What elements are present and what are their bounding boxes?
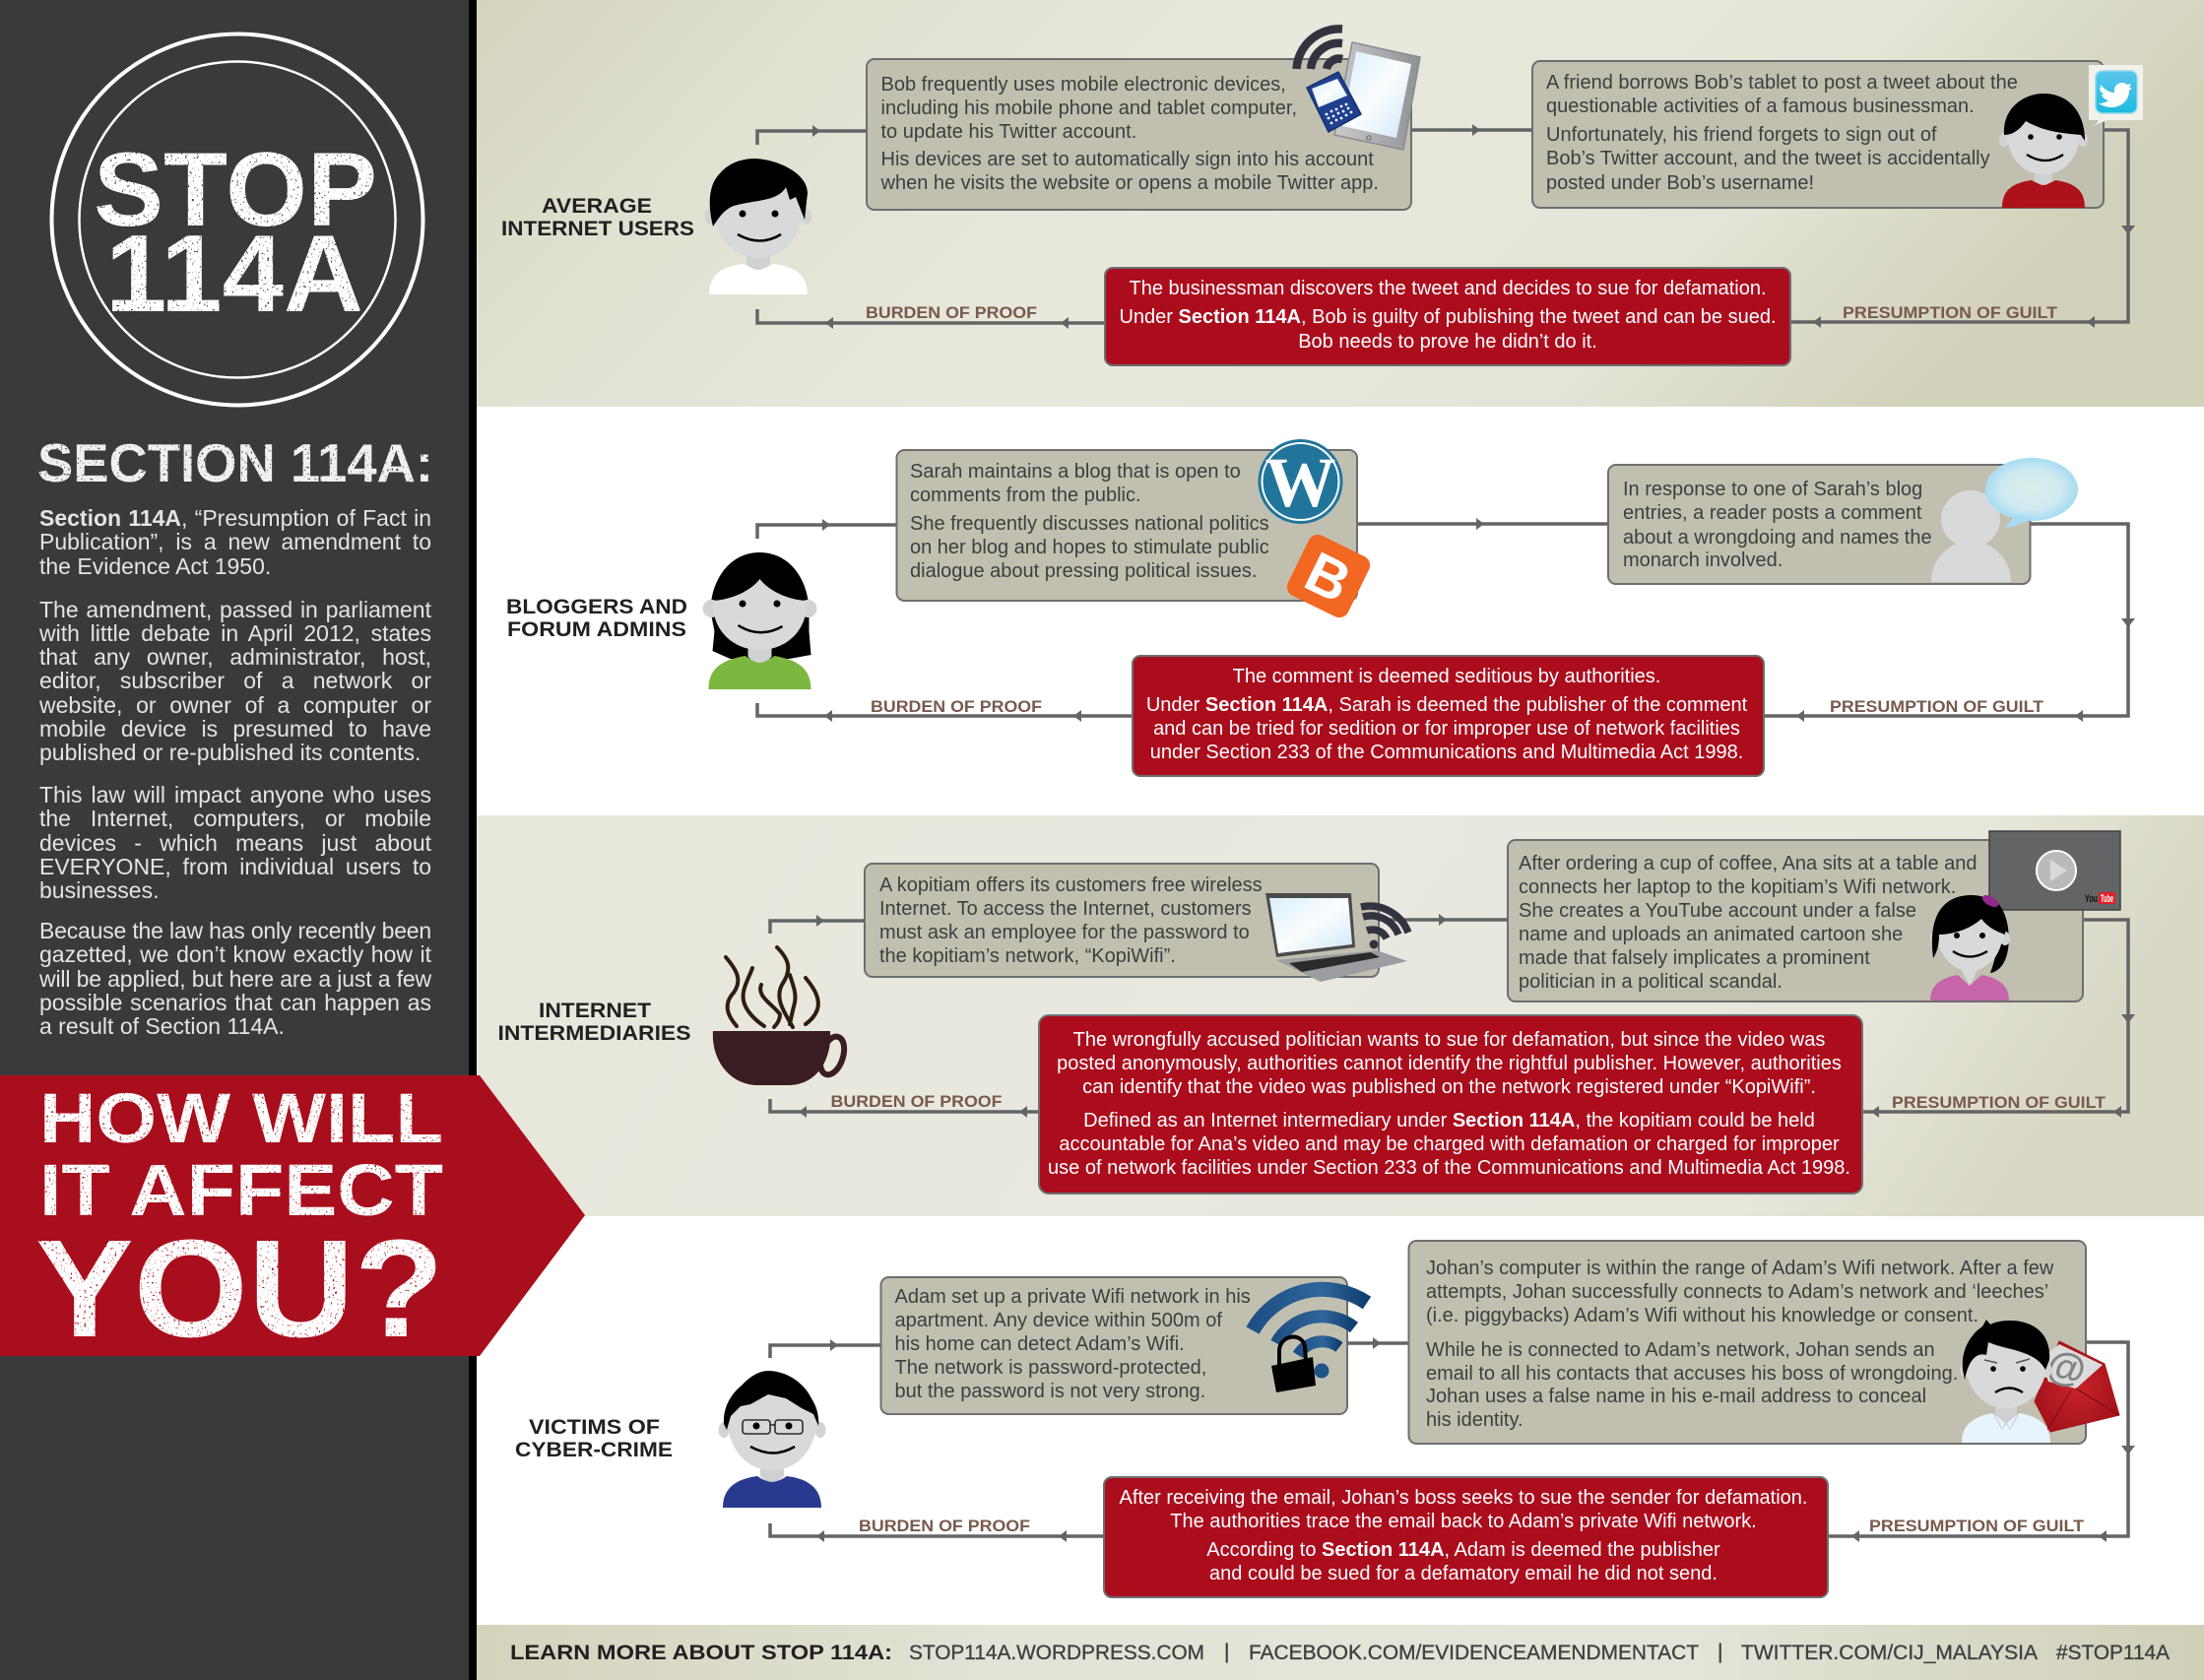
text box: friend's tweet: A friend borrows Bob’s tablet to post a tweet about the [1546,72,2018,94]
paragraph: who is affected [39,782,431,903]
icon: youtube video [1989,831,2120,910]
paragraph: what the amendment states [39,597,431,765]
category label: INTERMEDIARIES [498,1022,691,1045]
text box: Bob's devices: including his mobile phone and tablet computer, [880,97,1297,119]
text box: Bob's devices: Bob frequently uses mobile electronic devices, [880,74,1286,96]
paragraph: possible scenarios [39,918,431,1039]
text box: friend's tweet: posted under Bob’s username! [1546,172,1814,194]
paragraph: what section 114A is: the Evidence Act 1950. [39,553,271,579]
text box: Sarah's blog [896,450,1357,601]
text box: Ana's video: name and uploads an animated cartoon she [1519,924,1903,945]
character: anonymous reader [1931,490,2011,582]
paragraph: what the amendment states: that any owner, administrator, host, [39,644,431,670]
label: burden of proof: BURDEN OF PROOF [859,1518,1030,1535]
red box: consequence [1105,268,1790,365]
text box: Ana's video: After ordering a cup of coffee, Ana sits at a table and [1519,853,1977,874]
icon: wordpress: W [1264,443,1335,522]
text box: Adam's wifi: but the password is not very strong. [894,1381,1205,1402]
connector arrows [757,124,2135,329]
icon: steaming coffee cup [713,947,849,1085]
footer: links: TWITTER.COM/CIJ_MALAYSIA [1741,1642,2038,1664]
paragraph: what the amendment states: published or re-published its contents. [39,740,421,765]
paragraph: what section 114A is: Section 114A, “Presumption of Fact in [39,505,431,531]
red box: consequence: and can be tried for sedition or for improper use of network facilities [1153,718,1740,740]
logo: stop 114A stamp: STOP [94,130,377,248]
text box: Ana's video: connects her laptop to the kopitiam’s Wifi network. [1519,876,1956,898]
category label: VICTIMS OF [529,1416,660,1439]
character: Adam [719,1371,825,1508]
banner headline text [35,1080,444,1366]
paragraph: possible scenarios: will be applied, but here are a just a few [39,966,431,992]
text box: Bob's devices: when he visits the website or opens a mobile Twitter app. [880,172,1379,194]
paragraph: what the amendment states: The amendment, passed in parliament [39,597,431,622]
red box: consequence: The authorities trace the email back to Adam’s private Wifi network. [1170,1511,1757,1532]
label: presumption of guilt: PRESUMPTION OF GUILT [1830,698,2043,716]
connector arrows [770,1337,2135,1542]
icon: red envelope [2035,1341,2119,1432]
text box: Johan's email: his identity. [1426,1409,1523,1431]
red box: consequence: use of network facilities under Section 233 of the Communications and Multimedia Act 1998. [1048,1157,1850,1179]
text box: kopitiam wifi: A kopitiam offers its customers free wireless [879,874,1263,896]
text box: kopitiam wifi [865,864,1379,977]
red box: consequence: posted anonymously, authorities cannot identify the rightful publisher. However, authorities [1057,1053,1842,1074]
category label: BLOGGERS AND [506,596,687,618]
category label: FORUM ADMINS [507,618,686,641]
text box: Johan's email: (i.e. piggybacks) Adam’s Wifi without his knowledge or consent. [1426,1305,1978,1326]
icon: wifi, tablet and phone [1296,29,1420,150]
text box: Johan's email: While he is connected to Adam’s network, Johan sends an [1426,1339,1935,1361]
red box: consequence [1039,1015,1862,1194]
paragraph: who is affected: EVERYONE, from individual users to [39,854,431,879]
logo: stop 114A stamp [51,33,423,406]
paragraph: who is affected: the Internet, computers, or mobile [39,806,431,831]
character: Sarah [703,552,817,689]
paragraph: who is affected: businesses. [39,877,159,903]
text box: Bob's devices [867,59,1411,210]
red box: consequence: under Section 233 of the Communications and Multimedia Act 1998. [1150,742,1743,763]
red box: consequence [1104,1477,1828,1597]
panel: sidebar background [0,0,477,1680]
section 4: victims of cyber-crime [515,1241,2135,1597]
connector arrows [770,914,2135,1118]
red box: consequence: Defined as an Internet intermediary under Section 114A, the kopitiam could be held [1083,1110,1815,1131]
icon: youtube video: Tube [2101,893,2113,905]
red box: consequence: The comment is deemed seditious by authorities. [1233,666,1660,687]
icon: speech bubble [1985,458,2078,528]
banner headline text: YOU? [35,1210,444,1366]
text box: reader's comment: In response to one of Sarah’s blog [1623,479,1922,500]
text box: friend's tweet: Unfortunately, his friend forgets to sign out of [1546,124,1937,146]
paragraph: what the amendment states: mobile device is presumed to have [39,716,431,742]
banner: how will it affect you [0,1075,585,1366]
character: Bob [705,159,811,294]
section 1: average internet users [501,29,2143,365]
red box: consequence [1133,656,1764,776]
text box: friend's tweet: questionable activities of a famous businessman. [1546,96,1975,117]
banner headline text: IT AFFECT [39,1149,443,1231]
section 3: internet intermediaries [498,831,2135,1194]
paragraph: who is affected: devices - which means just about [39,830,431,856]
category label [501,195,694,240]
logo: stop 114A stamp: 114A [105,213,363,335]
category label: AVERAGE [542,195,652,218]
label: burden of proof: BURDEN OF PROOF [871,698,1042,716]
paragraph: possible scenarios: a result of Section 114A. [39,1013,285,1039]
footer: links [909,1641,2170,1664]
red box: consequence: Under Section 114A, Bob is guilty of publishing the tweet and can be sued. [1119,306,1777,328]
paragraph: what section 114A is [39,505,431,579]
paragraph: possible scenarios: possible scenarios that can happen as [39,990,431,1015]
sidebar body text [39,505,431,1039]
text box: Adam's wifi: his home can detect Adam’s Wifi. [894,1333,1185,1355]
red box: consequence: can identify that the video was published on the network registered under “KopiWifi”. [1082,1076,1816,1098]
paragraph: what section 114A is: Publication”, is a new amendment to [39,529,431,554]
footer: links: STOP114A.WORDPRESS.COM [909,1642,1204,1664]
text box: Sarah's blog: She frequently discusses national politics [910,513,1269,535]
red box: consequence: accountable for Ana’s video and may be charged with defamation or charged for improper [1059,1133,1840,1155]
footer: links: #STOP114A [2056,1642,2170,1664]
text box: Johan's email: email to all his contacts that accuses his boss of wrongdoing. [1426,1363,1958,1385]
icon: blogger: B [1295,540,1360,615]
footer: links: | [1718,1641,1722,1663]
text box: friend's tweet [1532,61,2104,208]
category label: CYBER-CRIME [515,1439,673,1461]
character: Ana [1930,893,2010,1001]
icon: laptop with wifi [1265,893,1408,982]
label: presumption of guilt: PRESUMPTION OF GUILT [1843,304,2057,322]
text box: reader's comment [1608,465,2031,584]
text box: Johan's email [1408,1241,2086,1444]
text box: Johan's email: Johan’s computer is within the range of Adam’s Wifi network. After a few [1426,1258,2054,1279]
footer: links: FACEBOOK.COM/EVIDENCEAMENDMENTACT [1249,1642,1699,1664]
red box: consequence: After receiving the email, Johan’s boss seeks to sue the sender for defamation. [1120,1487,1807,1509]
text box: friend's tweet: Bob’s Twitter account, and the tweet is accidentally [1546,148,1990,169]
footer: links: | [1224,1641,1229,1663]
text box: Sarah's blog: on her blog and hopes to stimulate public [910,537,1269,558]
category label [506,596,687,641]
heading: section 114A: SECTION 114A: [37,432,433,493]
paragraph: what the amendment states: with little debate in April 2012, states [39,620,431,646]
text box: Sarah's blog: Sarah maintains a blog that is open to [910,461,1241,483]
text box: Ana's video: politician in a political scandal. [1519,971,1783,993]
label: burden of proof: BURDEN OF PROOF [831,1093,1003,1111]
text box: reader's comment: monarch involved. [1623,549,1783,571]
text box: kopitiam wifi: the kopitiam’s network, “KopiWifi”. [879,945,1176,967]
label: presumption of guilt: PRESUMPTION OF GUILT [1869,1518,2084,1535]
footer: learn more heading: LEARN MORE ABOUT STOP 114A: [510,1642,892,1664]
text box: Adam's wifi: apartment. Any device within 500m of [894,1310,1222,1331]
text box: Bob's devices: His devices are set to automatically sign into his account [880,149,1374,170]
text box: Johan's email: attempts, Johan successfully connects to Adam’s network and ‘leeches’ [1426,1281,2048,1303]
icon: wifi with padlock [1253,1289,1367,1392]
icon: red envelope: @ [2043,1342,2090,1393]
paragraph: who is affected: This law will impact anyone who uses [39,782,431,808]
red box: consequence: The businessman discovers the tweet and decides to sue for defamation. [1129,278,1767,299]
text box: Johan's email: Johan uses a false name in his e-mail address to conceal [1426,1386,1926,1407]
text box: Ana's video: She creates a YouTube account under a false [1519,900,1916,922]
red box: consequence: Under Section 114A, Sarah is deemed the publisher of the comment [1146,694,1748,716]
text box: Ana's video [1508,840,2083,1002]
connector arrows [757,518,2135,722]
red box: consequence: According to Section 114A, Adam is deemed the publisher [1206,1539,1720,1561]
text box: reader's comment: about a wrongdoing and names the [1623,527,1932,549]
red box: consequence: Bob needs to prove he didn’t do it. [1298,331,1597,353]
label: presumption of guilt: PRESUMPTION OF GUILT [1892,1094,2106,1112]
section 2: bloggers and forum admins [506,439,2135,776]
label: burden of proof: BURDEN OF PROOF [866,304,1037,322]
red box: consequence: and could be sued for a defamatory email he did not send. [1209,1563,1718,1584]
text box: kopitiam wifi: must ask an employee for the password to [879,922,1250,943]
category label [515,1416,673,1461]
text box: Adam's wifi [880,1277,1347,1414]
character: friend [1999,94,2088,208]
paragraph: what the amendment states: website, or owner of a computer or [39,691,431,717]
footer bar [477,1625,2204,1680]
text box: kopitiam wifi: Internet. To access the Internet, customers [879,898,1252,920]
category label [498,1000,691,1045]
paragraph: possible scenarios: Because the law has only recently been [39,918,431,943]
text box: Adam's wifi: The network is password-protected, [894,1357,1206,1379]
text box: Sarah's blog: comments from the public. [910,485,1141,506]
text box: Sarah's blog: dialogue about pressing political issues. [910,560,1257,582]
category label: INTERNET [539,1000,651,1022]
paragraph: what the amendment states: editor, subscriber of a network or [39,668,431,693]
icon: youtube video: You [2085,893,2098,905]
icon: blogger [1284,532,1373,620]
panel: section backgrounds [477,0,2204,1625]
text box: reader's comment: entries, a reader posts a comment [1623,502,1922,524]
banner headline text: HOW WILL [39,1080,443,1158]
red box: consequence: The wrongfully accused politician wants to sue for defamation, but since the video was [1073,1029,1825,1051]
text box: Adam's wifi: Adam set up a private Wifi network in his [894,1286,1251,1308]
character: Johan [1960,1320,2052,1443]
paragraph: possible scenarios: gazetted, we don’t know exactly how it [39,941,431,967]
category label: INTERNET USERS [501,218,694,240]
text box: Bob's devices: to update his Twitter account. [880,121,1136,143]
text box: Ana's video: made that falsely implicates a prominent [1519,947,1870,969]
icon: twitter bubble [2089,65,2143,126]
